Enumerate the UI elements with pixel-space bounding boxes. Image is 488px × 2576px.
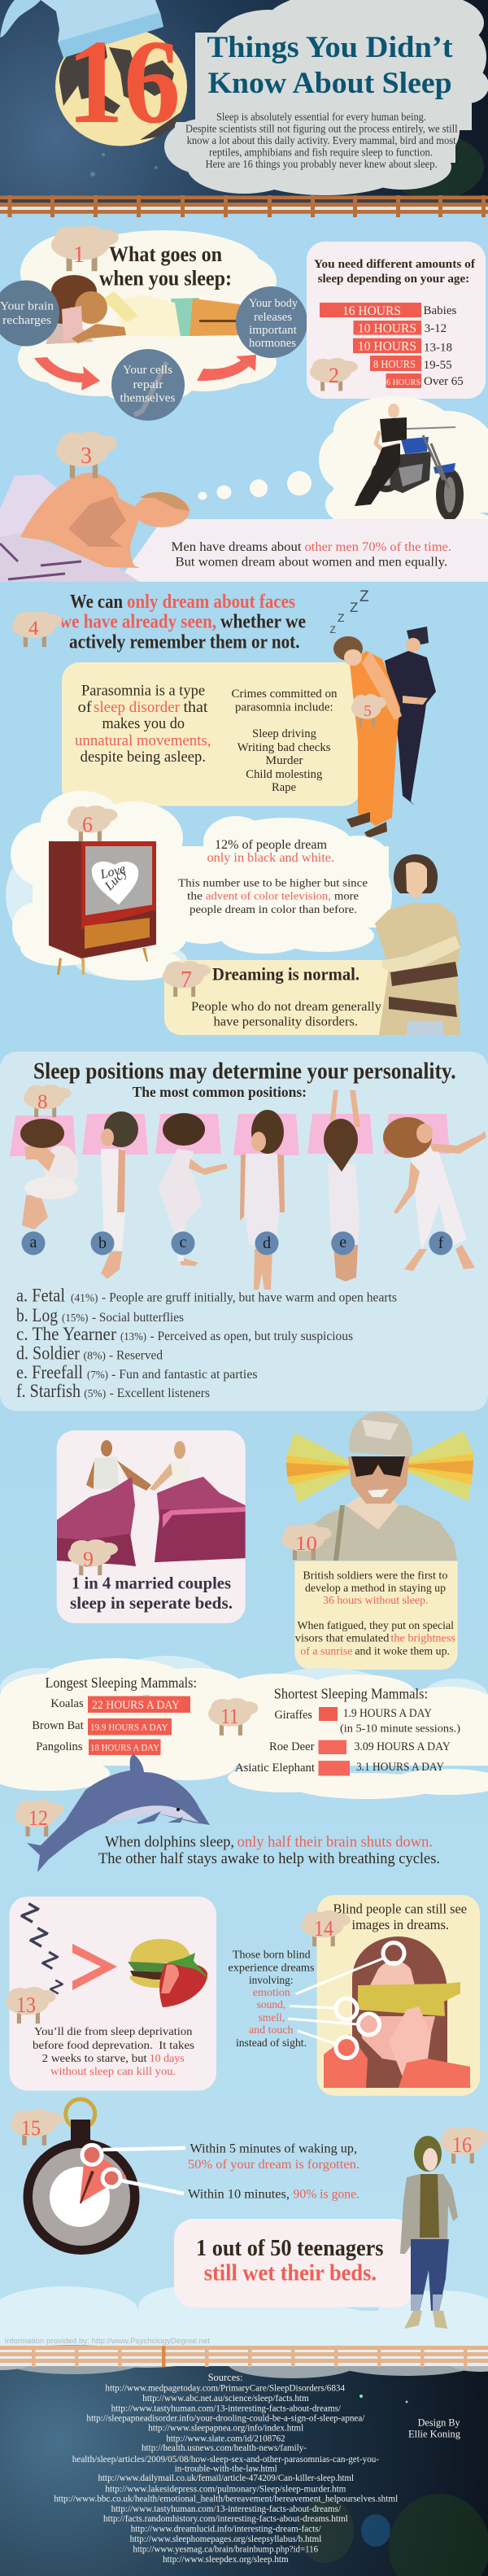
- heading: What goes on: [109, 242, 222, 266]
- bar chart: hours by age: 3-12: [425, 322, 447, 335]
- design credit: [408, 2417, 460, 2440]
- letter markers: c: [180, 1233, 187, 1251]
- text: senses: smell,: [259, 2012, 285, 2024]
- text: black and white: 12% of people dream: [215, 838, 327, 852]
- sheep 8: [24, 1085, 72, 1117]
- thought cloud: man on motorcycle: [319, 396, 488, 535]
- bar chart: hours by age: [320, 303, 464, 388]
- sheep 6: 6: [82, 813, 93, 836]
- text: forgetting: 50% of your dream is forgotten.: [188, 2158, 359, 2172]
- circle: hormones: Your body: [249, 297, 298, 310]
- cloud: black and white dreams: [171, 816, 392, 954]
- bar chart: hours by age: 16 HOURS: [342, 304, 401, 318]
- text: faces: actively remember them or not.: [69, 631, 299, 653]
- prisoner: [333, 636, 402, 838]
- soldier with visors: [286, 1412, 473, 1561]
- Zzz: Z: [330, 624, 336, 635]
- couple illustration: [57, 1440, 246, 1566]
- sources: http://www.yesmag.ca/brain/brainbump.php?id=116: [133, 2545, 318, 2555]
- text: black and white: people dream in color than before.: [190, 904, 357, 916]
- crimes list: Writing bad checks: [237, 741, 331, 754]
- chart: longest sleeping mammals: [32, 1674, 197, 1755]
- text band: men dream: But women dream about women and men equally.: [176, 556, 447, 570]
- officer: [385, 627, 436, 806]
- Zzz: Z: [350, 600, 358, 615]
- letter markers: a: [30, 1233, 37, 1251]
- text: 2 weeks to starve, but: [42, 2053, 147, 2065]
- definition text: that: [184, 700, 208, 716]
- sheep 4: 4: [28, 618, 39, 640]
- panel: dreaming is normal: Dreaming is normal.: [212, 964, 359, 985]
- sources: in-trouble-with-the-law.html: [175, 2464, 277, 2473]
- panel: teenagers: 1 out of 50 teenagers: [196, 2235, 384, 2261]
- circle: hormones: hormones: [249, 337, 296, 350]
- chart: longest sleeping mammals: Longest Sleeping Mammals:: [46, 1674, 197, 1691]
- chart: shortest sleeping mammals: Asiatic Elephant: [235, 1762, 315, 1775]
- panel: sleep by age: [307, 242, 486, 399]
- Zzz: Z: [338, 611, 345, 624]
- definition text: makes you do: [102, 716, 185, 732]
- caption: sleep in seperate beds.: [70, 1593, 233, 1613]
- text: dolphins: only half their brain shuts down.: [237, 1833, 433, 1850]
- position list: - Reserved: [109, 1349, 163, 1362]
- sheep 13: 13: [16, 1993, 36, 2017]
- text: senses: involving:: [249, 1975, 293, 1987]
- sources: http://www.dreamlucid.info/interesting-dream-facts/: [131, 2524, 321, 2534]
- bar chart: hours by age: 19-55: [424, 359, 452, 372]
- caption: sleep depending on your age:: [318, 273, 469, 286]
- text: dolphins: The other half stays awake to help with breathing cycles.: [98, 1850, 440, 1867]
- panel: parasomnia: [62, 662, 361, 806]
- bar chart: hours by age: 6 HOURS: [386, 378, 420, 387]
- chart: longest sleeping mammals: 22 HOURS A DAY: [92, 1699, 180, 1712]
- text: faces: only dream about faces: [127, 592, 295, 613]
- heading: images in dreams.: [351, 1917, 449, 1932]
- text: faces: We can: [70, 592, 123, 613]
- panel: dreaming is normal: have personality disorders.: [213, 1015, 358, 1028]
- chart: longest sleeping mammals: Pangolins: [36, 1740, 83, 1753]
- crimes list: Murder: [265, 754, 303, 767]
- position list: - Social butterflies: [92, 1311, 184, 1325]
- text: senses: and touch: [249, 2024, 293, 2037]
- circle: hormones: [236, 286, 307, 358]
- footer night sky: [0, 2360, 488, 2576]
- text: 10 days: [150, 2053, 185, 2065]
- chart: shortest sleeping mammals: Shortest Sleeping Mammals:: [274, 1686, 428, 1702]
- panel: british soldiers: British soldiers were the first to: [303, 1570, 448, 1582]
- dolphin: [27, 1754, 210, 1872]
- greater than sign: [72, 1944, 117, 1990]
- text: senses: instead of sight.: [236, 2037, 307, 2050]
- position a: fetal: [20, 1119, 78, 1229]
- title: Things You Didn’t: [207, 31, 453, 64]
- crimes list: Crimes committed on: [231, 688, 338, 701]
- sheep 5: 5: [364, 702, 372, 720]
- intro text: Here are 16 things you probably never knew about sleep.: [206, 158, 438, 170]
- sheep 3: 3: [81, 443, 92, 469]
- sheep 7: [163, 961, 211, 997]
- panel: british soldiers: develop a method in staying up: [305, 1582, 446, 1594]
- sources: http://www.sleepapnea.org/info/index.html: [148, 2423, 303, 2433]
- sheep 7: 7: [181, 967, 192, 993]
- position list: - People are gruff initially, but have warm and open hearts: [102, 1290, 397, 1305]
- sleeping man in bed: [0, 473, 190, 582]
- panel: british soldiers: of a sunrise: [300, 1645, 352, 1657]
- bar chart: hours by age: 8 HOURS: [373, 359, 416, 371]
- text: [33, 2026, 194, 2078]
- text: black and white: advent of color television,: [206, 891, 331, 903]
- sheep 6: [68, 806, 118, 841]
- sources: http://www.slate.com/id/2108762: [166, 2434, 285, 2444]
- police officer and prisoner: [333, 627, 436, 838]
- soldier figure: [294, 1412, 457, 1561]
- text: dolphins: When dolphins sleep,: [105, 1833, 234, 1850]
- cloud: [18, 230, 281, 404]
- sheep 2: [310, 358, 358, 391]
- panel: dreaming is normal: [164, 960, 390, 1035]
- blindfolded woman: [324, 1936, 470, 2088]
- letter markers: e: [339, 1233, 346, 1251]
- position f: starfish: [383, 1117, 486, 1271]
- intro text: know a lot about this daily activity. Every mammal, bird and most: [187, 134, 456, 146]
- position list: b. Log: [16, 1305, 58, 1325]
- sources: Sources:: [208, 2371, 243, 2383]
- bar chart: hours by age: 13-18: [424, 342, 452, 355]
- panel: married couples: [57, 1430, 246, 1623]
- teenager: [400, 2136, 458, 2329]
- crimes list: Rape: [272, 781, 296, 794]
- television: [49, 841, 156, 975]
- position list: d. Soldier: [16, 1343, 80, 1364]
- position list: - Perceived as open, but truly suspicious: [150, 1329, 353, 1343]
- panel: blind people: [288, 1895, 480, 2096]
- cloud: TV: [6, 791, 187, 980]
- sheep 11: [208, 1698, 259, 1736]
- sources: http://www.tastyhuman.com/13-interesting-facts-about-dreams/: [111, 2404, 342, 2414]
- caption: [70, 1573, 233, 1613]
- connector lines: [288, 1943, 404, 2059]
- text: black and white: This number use to be higher but since: [178, 877, 368, 889]
- heading: [333, 1901, 467, 1932]
- sheep 9: 9: [83, 1548, 94, 1571]
- arrow right: [197, 355, 256, 381]
- title: [207, 31, 453, 100]
- text band: men dream: [118, 519, 488, 582]
- crimes list: Sleep driving: [252, 727, 316, 740]
- text: senses: Those born blind: [233, 1949, 311, 1962]
- panel: what goes on when you sleep: [0, 225, 307, 421]
- chart: shortest sleeping mammals: 3.09 HOURS A DAY: [355, 1740, 451, 1753]
- position list: f. Starfish: [16, 1381, 81, 1401]
- sheep 3: [56, 431, 117, 478]
- definition text: [75, 683, 211, 766]
- Z letters: Z: [16, 1897, 43, 1928]
- position list: a. Fetal: [16, 1286, 65, 1305]
- definition text: despite being asleep.: [81, 749, 206, 766]
- sheep 12: 12: [28, 1806, 48, 1830]
- text: senses: [228, 1949, 314, 2050]
- big number 16: 16: [67, 15, 181, 149]
- position list: c. The Yearner: [16, 1324, 116, 1344]
- text: black and white: [178, 838, 368, 916]
- text: You’ll die from sleep deprivation: [34, 2026, 192, 2038]
- position list: - Excellent listeners: [110, 1386, 210, 1400]
- text: senses: sound,: [257, 1999, 285, 2011]
- stopwatch: [23, 2099, 185, 2255]
- crimes list: [231, 688, 338, 794]
- footer clouds: [0, 2345, 488, 2378]
- text: without sleep can kill you.: [50, 2066, 176, 2078]
- thought bubbles: [198, 471, 312, 500]
- sheep 12: [15, 1800, 63, 1836]
- subheading: The most common positions:: [133, 1084, 307, 1100]
- definition text: sleep disorder: [94, 700, 180, 716]
- position list: (15%): [62, 1312, 89, 1325]
- heading: [99, 242, 232, 290]
- bar chart: hours by age: 10 HOURS: [358, 340, 416, 353]
- caption: [314, 258, 476, 286]
- sheep 16: 16: [452, 2133, 472, 2157]
- sources: http://www.sleephomepages.org/sleepsyllabus/b.html: [130, 2535, 321, 2544]
- caption: You need different amounts of: [314, 258, 476, 271]
- sources: http://www.lakesidepress.com/pulmonary/Sleep/sleep-murder.htm: [105, 2485, 346, 2495]
- Zzz: [330, 588, 369, 635]
- text: dolphins: [98, 1833, 440, 1867]
- letter markers: f: [438, 1234, 444, 1252]
- intro text: Despite scientists still not figuring out the process entirely, we still: [185, 123, 458, 135]
- sheep 11: 11: [221, 1705, 239, 1728]
- panel: sleep deprivation: [6, 1897, 216, 2091]
- moon: [55, 28, 187, 146]
- text: faces: [59, 592, 306, 653]
- sources: http://sleepapneadisorder.info/your-drooling-could-be-a-sign-of-sleep-apnea/: [86, 2413, 365, 2423]
- bottom cloud: [0, 2286, 488, 2347]
- sheep 8: 8: [37, 1091, 47, 1113]
- position e: freefall: [324, 1090, 360, 1281]
- circle: cells: repair: [133, 378, 163, 391]
- motorcycle and rider: [355, 404, 464, 521]
- heart text: Love: [98, 862, 127, 882]
- sheep 10: [281, 1524, 332, 1560]
- circle: cells: [111, 349, 185, 421]
- position c: yearner: [159, 1113, 228, 1266]
- sheep 2: 2: [329, 364, 339, 387]
- sheep 13: [6, 1987, 56, 2024]
- circle: brain: Your brain: [0, 300, 54, 313]
- sheep 10: 10: [295, 1533, 317, 1555]
- intro text: Sleep is absolutely essential for every human being.: [216, 111, 426, 123]
- panel: teenagers: still wet their beds.: [204, 2260, 377, 2286]
- header night sky: [0, 0, 488, 203]
- chart: shortest sleeping mammals: [235, 1686, 460, 1775]
- sources: http://www.dailymail.co.uk/femail/article-474209/Can-killer-sleep.html: [98, 2473, 354, 2483]
- text: forgetting: 90% is gone.: [293, 2187, 359, 2201]
- sources: http://facts.randomhistory.com/interesting-facts-about-dreams.html: [103, 2514, 348, 2524]
- bar chart: hours by age: Babies: [423, 304, 456, 317]
- circle: cells: themselves: [120, 392, 176, 405]
- sources: health/sleep/articles/2009/05/08/how-sleep-sex-and-other-parasomnias-can-get-you-: [72, 2455, 379, 2465]
- nightcap: [0, 0, 163, 58]
- callout rings: [82, 2145, 185, 2194]
- Z letters: Z: [26, 1922, 52, 1953]
- position list: [16, 1286, 397, 1401]
- letter markers: [21, 1232, 452, 1255]
- text: before food deprevation. It takes: [33, 2040, 194, 2052]
- position list: (7%): [87, 1369, 108, 1382]
- circle: brain: recharges: [2, 314, 51, 327]
- chart: shortest sleeping mammals: Roe Deer: [269, 1740, 315, 1753]
- fence top: [0, 195, 488, 217]
- chart: longest sleeping mammals: 19.9 HOURS A DAY: [90, 1723, 168, 1733]
- chart: longest sleeping mammals: 18 HOURS A DAY: [90, 1743, 160, 1753]
- chart: shortest sleeping mammals: Giraffes: [275, 1709, 312, 1722]
- panel: british soldiers: 36 hours without sleep.: [323, 1594, 428, 1606]
- fence bottom: [0, 2346, 488, 2367]
- text: black and white: only in black and white.: [207, 851, 334, 865]
- chart: shortest sleeping mammals: (in 5-10 minute sessions.): [340, 1723, 460, 1735]
- caption: 1 in 4 married couples: [72, 1573, 231, 1592]
- letter markers: d: [263, 1234, 271, 1252]
- text: forgetting: Within 10 minutes,: [188, 2187, 290, 2201]
- light beams: [286, 1431, 473, 1503]
- Z letters: [16, 1897, 67, 1998]
- position d: soldier: [240, 1110, 285, 1290]
- position list: (8%): [83, 1351, 106, 1362]
- position list: - Fun and fantastic at parties: [111, 1368, 257, 1382]
- title: Know About Sleep: [208, 67, 452, 100]
- sheep 14: [301, 1910, 351, 1946]
- sheep 5: [351, 694, 386, 727]
- text: faces: we have already seen,: [59, 612, 216, 633]
- heading: Sleep positions may determine your personality.: [33, 1059, 456, 1084]
- sheep 15: [11, 2110, 63, 2146]
- sheep 9: [68, 1539, 118, 1575]
- Zzz: Z: [359, 588, 369, 605]
- definition text: unnatural movements,: [75, 733, 211, 749]
- title cloud: [164, 0, 488, 195]
- sheep 1: 1: [73, 242, 85, 268]
- letter markers: b: [98, 1234, 107, 1252]
- circle: hormones: important: [249, 324, 297, 337]
- cloud: mammals panel: [0, 1656, 488, 1799]
- bar chart: hours by age: Over 65: [424, 375, 464, 388]
- panel: dreaming is normal: People who do not dream generally: [191, 1000, 381, 1014]
- sheep 4: [12, 611, 63, 647]
- chart: shortest sleeping mammals: 3.1 HOURS A DAY: [356, 1761, 444, 1774]
- sources: http://www.abc.net.au/science/sleep/facts.htm: [142, 2394, 309, 2404]
- position list: (5%): [84, 1388, 107, 1400]
- text: senses: experience dreams: [228, 1963, 314, 1975]
- sources: [54, 2371, 398, 2565]
- definition text: of: [78, 700, 93, 716]
- chart: longest sleeping mammals: Brown Bat: [32, 1719, 84, 1732]
- heading: Blind people can still see: [333, 1901, 467, 1917]
- text: forgetting: [188, 2142, 359, 2201]
- panel: sleep positions: [0, 1052, 488, 1411]
- sheep 14: 14: [314, 1916, 333, 1941]
- heading: when you sleep:: [99, 267, 232, 290]
- Z letters: Z: [47, 1976, 67, 1998]
- chart: longest sleeping mammals: Koalas: [50, 1697, 84, 1710]
- sheep 1: [51, 225, 119, 271]
- panel: british soldiers: the brightness: [390, 1632, 455, 1644]
- sources: http://health.usnews.com/health-news/family-: [142, 2443, 307, 2453]
- circle: brain: [0, 280, 59, 347]
- burger: [128, 1939, 191, 1988]
- pillows: [10, 1114, 450, 1156]
- text band: men dream: other men 70% of the time.: [304, 540, 451, 554]
- sheep 15: 15: [21, 2116, 41, 2140]
- Z letters: Z: [38, 1946, 62, 1974]
- sources: http://www.sleepdex.org/sleep.htm: [163, 2555, 289, 2565]
- chart: shortest sleeping mammals: 1.9 HOURS A DAY: [343, 1707, 432, 1720]
- panel: british soldiers: [294, 1561, 458, 1670]
- text: black and white: the: [187, 891, 203, 903]
- panel: teenagers: [174, 2219, 414, 2307]
- sources: http://www.medpagetoday.com/PrimaryCare/SleepDisorders/6834: [105, 2384, 345, 2394]
- panel: british soldiers: visors that emulated: [295, 1632, 390, 1644]
- sources: http://www.bbc.co.uk/health/emotional_health/bereavement/bereavement_helpourselves.shtml: [54, 2494, 398, 2504]
- position list: (13%): [120, 1331, 146, 1343]
- credit line: Information provided by: http://www.PsychologyDegree.net: [5, 2337, 210, 2346]
- position b: log: [101, 1111, 138, 1279]
- bar chart: hours by age: 10 HOURS: [358, 322, 416, 335]
- intro text: [185, 111, 458, 170]
- intro text: reptiles, amphibians and fish require sleep to function.: [209, 146, 433, 159]
- design credit: Design By: [418, 2417, 460, 2428]
- woman in straitjacket: [375, 854, 460, 1035]
- heart text: Lucy: [102, 865, 130, 894]
- text: black and white: more: [334, 891, 359, 903]
- circle: hormones: releases: [254, 311, 292, 324]
- arrow left: [34, 357, 100, 391]
- circle: cells: Your cells: [123, 364, 172, 377]
- panel: british soldiers: and it woke them up.: [355, 1645, 450, 1657]
- panel: british soldiers: When fatigued, they put on special: [298, 1619, 454, 1631]
- text: forgetting: Within 5 minutes of waking up,: [190, 2142, 357, 2156]
- definition text: Parasomnia is a type: [81, 683, 205, 700]
- sources: http://www.tastyhuman.com/13-interesting-facts-about-dreams/: [111, 2504, 342, 2514]
- text band: men dream: Men have dreams about: [171, 540, 302, 554]
- design credit: Ellie Koning: [408, 2428, 460, 2440]
- text: faces: whether we: [220, 612, 306, 633]
- strawberry: [159, 1953, 209, 2007]
- position list: (41%): [71, 1292, 98, 1305]
- crimes list: parasomnia include:: [235, 701, 333, 714]
- sleeping woman: [46, 275, 240, 344]
- sheep 16: [441, 2127, 488, 2163]
- crimes list: Child molesting: [246, 768, 322, 781]
- position list: e. Freefall: [16, 1362, 83, 1382]
- text: senses: emotion: [253, 1987, 290, 1999]
